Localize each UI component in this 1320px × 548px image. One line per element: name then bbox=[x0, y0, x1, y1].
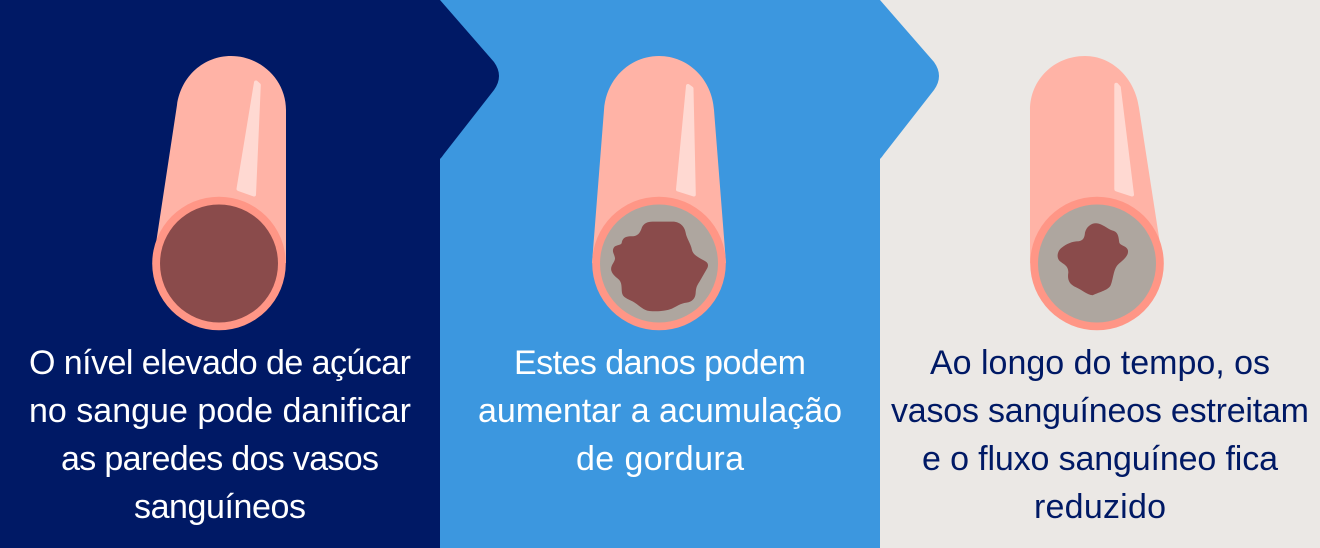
text block: step two: de gordura bbox=[576, 440, 744, 478]
icon: vessel with fat build-up bbox=[592, 56, 726, 330]
text block: step one: no sangue pode danificar bbox=[29, 392, 411, 430]
text block: step two: Estes danos podem bbox=[514, 344, 806, 382]
panel: second step background with arrow bbox=[440, 0, 939, 548]
text block: step one: O nível elevado de açúcar bbox=[29, 344, 411, 382]
text block: step two: aumentar a acumulação bbox=[478, 392, 842, 430]
panel: first step background with arrow bbox=[0, 0, 499, 548]
text block: step one: as paredes dos vasos bbox=[61, 440, 379, 478]
text block: step three: reduzido bbox=[1034, 488, 1166, 526]
icon: healthy blood vessel bbox=[152, 56, 286, 330]
icon: narrowed vessel bbox=[1030, 56, 1164, 330]
panel: third step background bbox=[880, 0, 1320, 548]
text block: step one bbox=[29, 344, 411, 526]
text block: step three: vasos sanguíneos estreitam bbox=[891, 392, 1309, 430]
text block: step three bbox=[891, 344, 1309, 526]
text block: step three: Ao longo do tempo, os bbox=[930, 344, 1270, 382]
text block: step one: sanguíneos bbox=[134, 488, 306, 526]
text block: step three: e o fluxo sanguíneo fica bbox=[922, 440, 1278, 478]
text block: step two bbox=[478, 344, 842, 478]
